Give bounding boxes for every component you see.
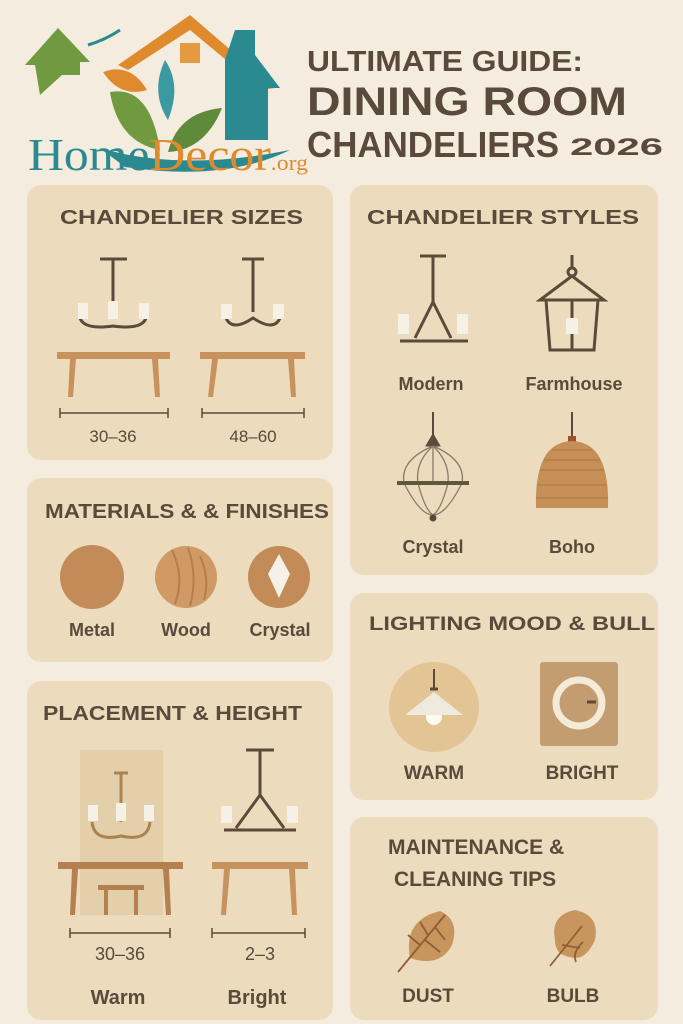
panel: chandelier sizes: 48–60 (229, 427, 277, 446)
panel: lighting (350, 593, 658, 800)
heading: placement: PLACEMENT & HEIGHT (43, 703, 302, 725)
heading: lighting: LIGHTING MOOD & BULL (369, 614, 655, 635)
title: CHANDELIERS (307, 124, 559, 165)
panel: lighting: WARM (404, 763, 464, 784)
panel: styles: Modern (398, 374, 464, 394)
title: 2026 (570, 134, 663, 161)
panel: chandelier sizes (27, 185, 333, 460)
panel: placement: 2–3 (245, 944, 275, 964)
icon: modern (398, 256, 468, 341)
panel: styles: Farmhouse (525, 374, 623, 394)
panel: styles: Crystal (402, 537, 464, 557)
logo: HomeDecor .org (28, 129, 308, 180)
panel: materials: Wood (161, 620, 211, 640)
icon: crystal (397, 412, 469, 521)
icon: bright dial (540, 662, 618, 746)
heading: styles: CHANDELIER STYLES (367, 207, 639, 229)
heading: materials: MATERIALS & & FINISHES (45, 501, 329, 523)
heading: maintenance (388, 836, 564, 891)
icon: warm lamp (389, 662, 479, 752)
panel: materials: Metal (69, 620, 115, 640)
panel: placement: 30–36 (95, 944, 145, 964)
icon: wood (155, 546, 217, 608)
panel: placement: Warm (91, 987, 145, 1009)
icon: bulb leaf (550, 910, 596, 966)
icon: crystal (248, 546, 310, 608)
panel: chandelier sizes: 30–36 (89, 427, 137, 446)
panel: placement: Bright (228, 987, 287, 1009)
panel: materials: Crystal (249, 620, 311, 640)
panel: materials (27, 478, 333, 662)
panel: placement (27, 681, 333, 1020)
title: ULTIMATE GUIDE: (307, 46, 583, 78)
logo (25, 15, 308, 180)
panel: lighting: BRIGHT (546, 763, 619, 784)
heading: sizes: CHANDELIER SIZES (60, 207, 303, 229)
icon: chandelier warm (88, 773, 154, 837)
panel: styles: Boho (549, 537, 595, 557)
title (307, 46, 663, 165)
title: DINING ROOM (307, 80, 627, 124)
icon: chandelier small table (78, 259, 149, 327)
heading: maintenance: MAINTENANCE & (388, 836, 564, 859)
icon: boho (536, 412, 608, 508)
panel: styles (350, 185, 658, 575)
icon: metal (60, 545, 124, 609)
icon: farmhouse (540, 255, 604, 350)
heading: maintenance: CLEANING TIPS (394, 868, 556, 891)
panel: maintenance: DUST (402, 986, 454, 1007)
icon: chandelier bright (221, 750, 298, 830)
icon: chandelier large table (221, 259, 284, 325)
icon: dust leaf (398, 911, 454, 972)
panel: maintenance: BULB (547, 986, 599, 1007)
panel: maintenance (350, 817, 658, 1020)
